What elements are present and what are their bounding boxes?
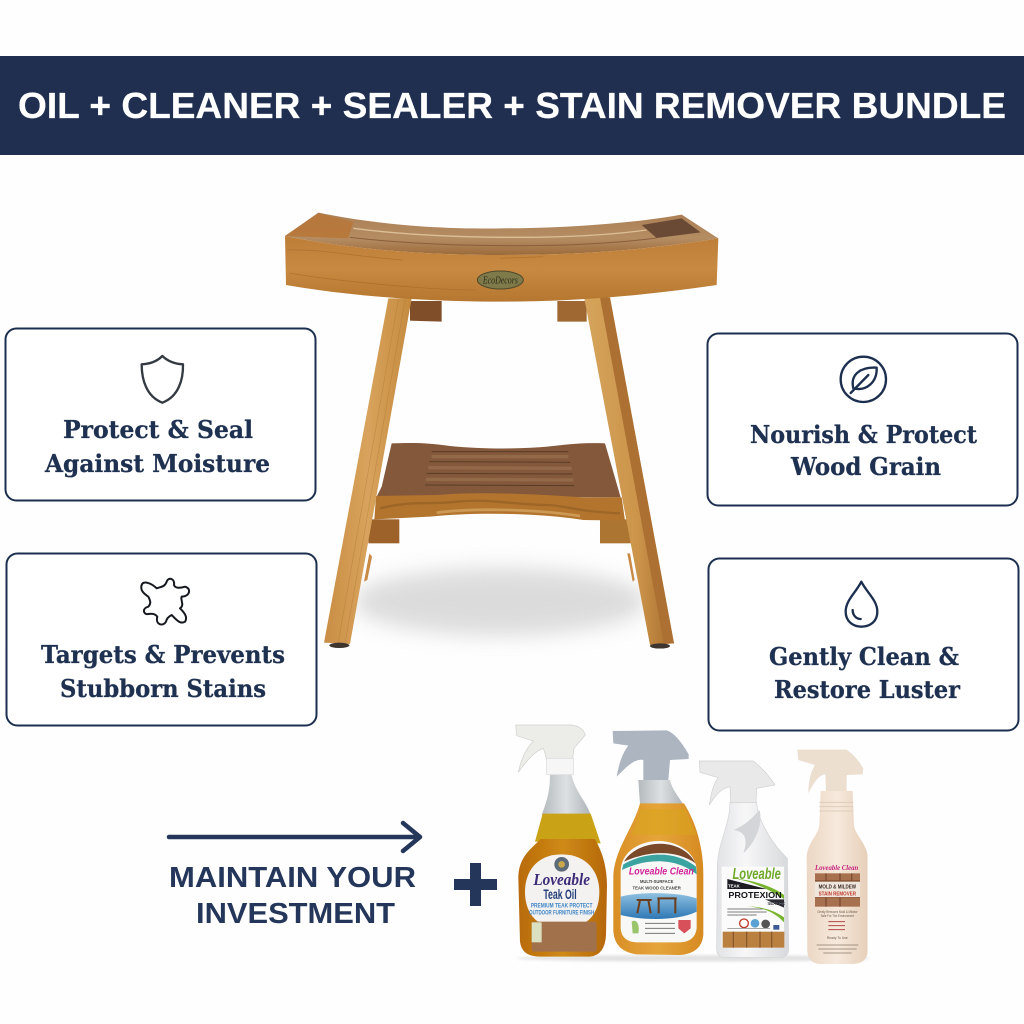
title: OIL + CLEANER + SEALER + STAIN REMOVER BUNDLE xyxy=(18,85,1006,126)
bottle: cleaner xyxy=(613,730,703,955)
plus sign xyxy=(454,863,497,906)
seat front face xyxy=(285,236,718,302)
bottle: stain remover: STAIN REMOVER xyxy=(819,891,856,897)
label xyxy=(621,841,697,942)
bottle: stain remover xyxy=(797,750,868,964)
bottle: cleaner: Loveable Clean xyxy=(629,866,694,877)
bottle: teak oil: Teak Oil xyxy=(543,886,577,902)
maintain your investment text xyxy=(169,862,416,930)
bottle: sealer: SEALER xyxy=(767,901,786,906)
title banner xyxy=(0,56,1024,155)
maintain your investment text: MAINTAIN YOUR xyxy=(169,862,416,894)
label xyxy=(722,867,784,948)
spray head xyxy=(613,730,689,780)
bottle: stain remover: Gently Removes Mold & Mildew xyxy=(817,910,858,914)
icon: splat xyxy=(141,579,189,624)
spray head xyxy=(516,725,585,772)
bottle: teak oil xyxy=(516,725,607,957)
card: protect and seal xyxy=(6,328,316,500)
bottle: cleaner: MULTI-SURFACE xyxy=(640,879,674,885)
bottle: sealer: PROTEXION xyxy=(728,890,782,900)
card: nourish wood xyxy=(708,334,1018,506)
bottle: stain remover: Safe For The Environment xyxy=(821,914,854,918)
icon: water drop xyxy=(846,582,877,627)
card: nourish wood: Wood Grain xyxy=(790,452,941,481)
lower cross blocks xyxy=(368,519,631,543)
card text: Gently Clean & xyxy=(769,642,959,671)
bottle: teak oil: Loveable xyxy=(532,870,590,889)
spray head xyxy=(797,750,863,793)
icon: leaf in circle xyxy=(841,357,886,402)
card text: Targets & Prevents xyxy=(41,640,285,669)
bottle: sealer xyxy=(699,761,789,957)
spray head xyxy=(699,761,775,805)
bottle: teak oil: OUTDOOR FURNITURE FINISH xyxy=(529,910,594,917)
front right leg xyxy=(584,297,674,649)
product bottles xyxy=(516,725,870,964)
card text: Nourish & Protect xyxy=(750,420,977,449)
card: targets stains: Stubborn Stains xyxy=(60,674,266,703)
arrow xyxy=(169,823,420,851)
card: protect and seal: Against Moisture xyxy=(44,449,270,478)
card: targets stains xyxy=(6,554,316,726)
upper cross blocks xyxy=(410,301,587,322)
bottle: stain remover: MOLD & MILDEW xyxy=(819,885,857,891)
bottle: sealer: TEAK xyxy=(728,883,741,888)
label: Loveable Clean xyxy=(814,863,858,872)
lower shelf top xyxy=(377,443,621,497)
card text: Protect & Seal xyxy=(63,415,253,444)
card: gently clean xyxy=(708,558,1018,730)
bottle: sealer: Loveable xyxy=(732,866,781,883)
bottle: stain remover: Ready To Use xyxy=(827,936,848,940)
card: gently clean: Restore Luster xyxy=(774,675,960,704)
front left leg xyxy=(324,298,412,648)
bottle: teak oil: PREMIUM TEAK PROTECT xyxy=(531,902,592,909)
seat top xyxy=(285,213,718,255)
brand plaque: EcoDecors xyxy=(482,275,518,286)
lower shelf front xyxy=(374,493,625,521)
icon: shield xyxy=(142,356,183,403)
bottle shadows xyxy=(517,955,870,962)
floor shadow xyxy=(353,568,647,635)
maintain your investment text: INVESTMENT xyxy=(196,898,395,930)
rear legs xyxy=(364,553,635,582)
bottle: cleaner: TEAK WOOD CLEANER xyxy=(632,886,681,892)
teak stool photo xyxy=(285,213,718,649)
brand plaque xyxy=(477,271,523,289)
label xyxy=(525,854,599,928)
